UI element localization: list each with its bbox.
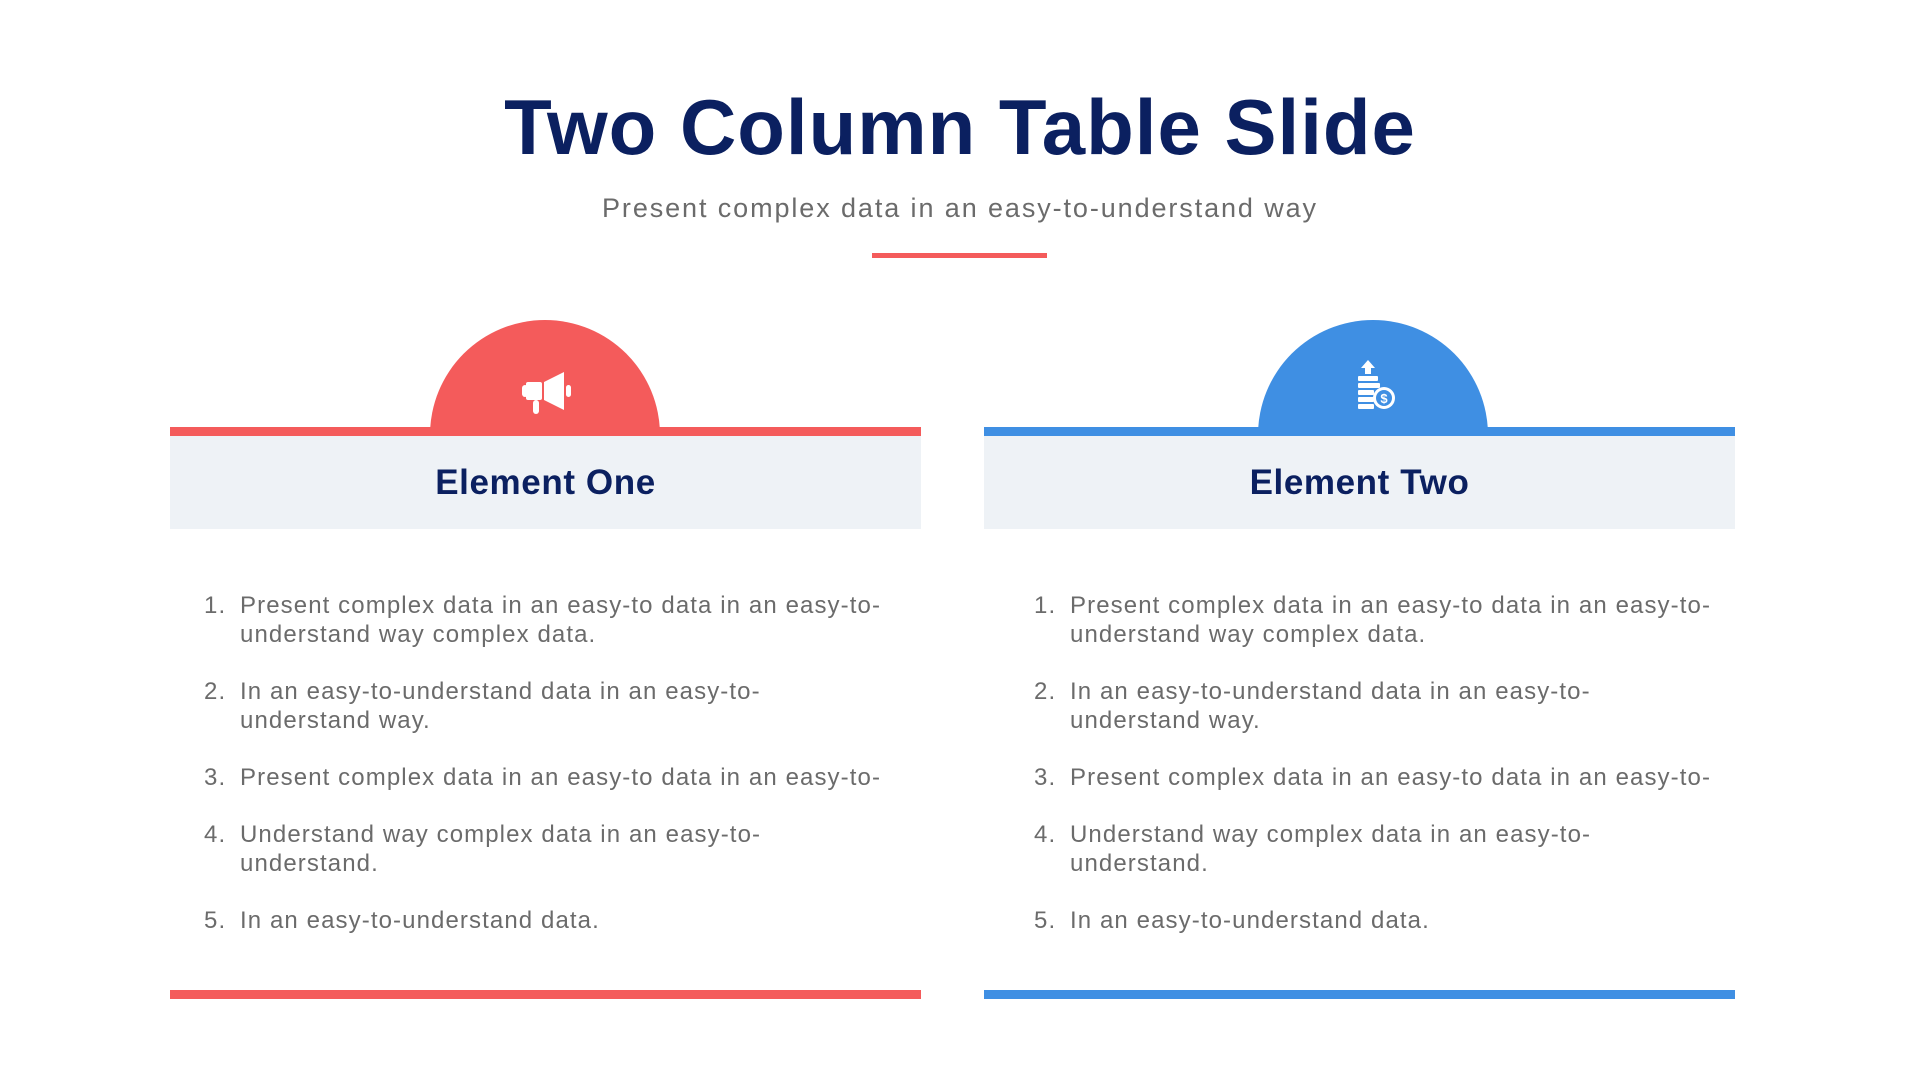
list: element two: Present complex data in an easy-to data in an easy-to- [1070, 592, 1711, 619]
list: element one: 4. [204, 821, 226, 848]
icon: coins with arrow [1358, 360, 1395, 409]
title: Two Column Table Slide [504, 83, 1416, 171]
top bar [984, 427, 1735, 436]
list: element two: 4. [1034, 821, 1056, 848]
top bar [170, 427, 921, 436]
icon badge: blue semicircle [1258, 320, 1488, 427]
list: element one [204, 592, 881, 934]
subtitle: Present complex data in an easy-to-understand way [602, 193, 1318, 223]
list: element two: understand way complex data. [1070, 621, 1426, 648]
list: element one: understand way complex data. [240, 621, 596, 648]
list: element two: 1. [1034, 592, 1056, 619]
icon: megaphone [522, 372, 571, 414]
list: element two: 2. [1034, 678, 1056, 705]
panel: element one [170, 320, 921, 999]
list: element two: In an easy-to-understand data. [1070, 907, 1430, 934]
list: element two: Present complex data in an easy-to data in an easy-to- [1070, 764, 1711, 791]
panel: element two [984, 320, 1735, 999]
list: element one: In an easy-to-understand data in an easy-to- [240, 678, 761, 705]
list: element one: Present complex data in an easy-to data in an easy-to- [240, 764, 881, 791]
list: element one: 3. [204, 764, 226, 791]
list: element two: understand way. [1070, 707, 1261, 734]
list: element two [1034, 592, 1711, 934]
icon badge: red semicircle [430, 320, 660, 427]
bottom bar [984, 990, 1735, 999]
heading: element two: Element Two [1250, 463, 1469, 502]
list: element one: Understand way complex data in an easy-to- [240, 821, 761, 848]
list: element two: Understand way complex data in an easy-to- [1070, 821, 1591, 848]
list: element two: In an easy-to-understand data in an easy-to- [1070, 678, 1591, 705]
icon: coins with arrow: $ [1380, 391, 1388, 406]
title underline [872, 253, 1047, 258]
list: element one: In an easy-to-understand data. [240, 907, 600, 934]
list: element one: understand. [240, 850, 379, 877]
list: element one: 5. [204, 907, 226, 934]
bottom bar [170, 990, 921, 999]
heading: element one: Element One [435, 463, 656, 502]
list: element one: Present complex data in an easy-to data in an easy-to- [240, 592, 881, 619]
list: element one: 2. [204, 678, 226, 705]
heading: element two [984, 436, 1735, 529]
heading: element one [170, 436, 921, 529]
list: element two: understand. [1070, 850, 1209, 877]
list: element two: 5. [1034, 907, 1056, 934]
list: element one: understand way. [240, 707, 431, 734]
list: element two: 3. [1034, 764, 1056, 791]
list: element one: 1. [204, 592, 226, 619]
